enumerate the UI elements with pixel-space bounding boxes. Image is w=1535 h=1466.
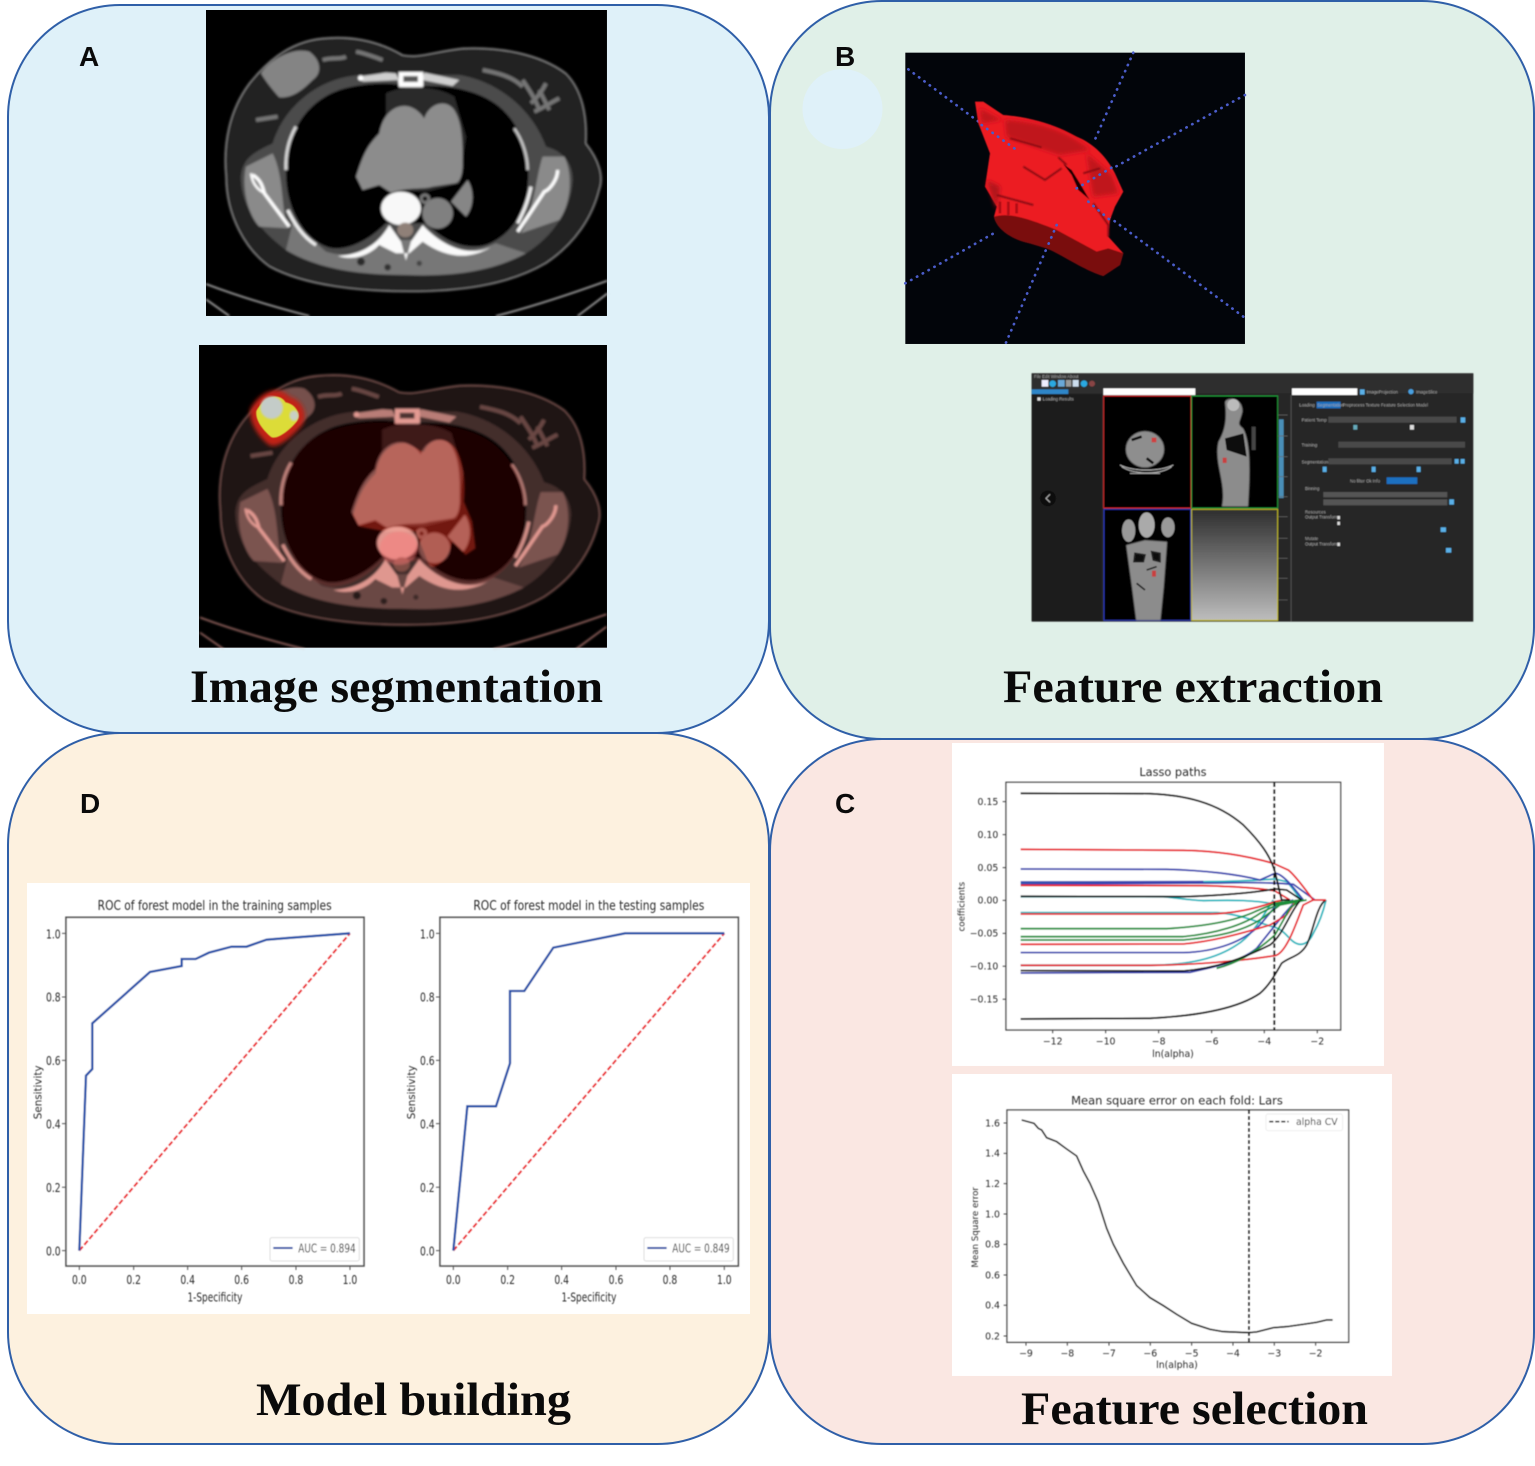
software screenshot: Segmentation	[1302, 459, 1329, 464]
label B: B	[835, 41, 855, 72]
chart: ROC testing: 0.2	[500, 1273, 515, 1287]
chart: mean square error: −9	[1019, 1348, 1033, 1359]
chart: ROC training	[32, 899, 364, 1305]
chart: Lasso paths: 0.10	[978, 830, 998, 841]
chart: Lasso paths: −0.05	[970, 929, 998, 940]
chart: Lasso paths: −0.15	[970, 995, 998, 1006]
panel: model building	[8, 733, 769, 1444]
chart: ROC testing: 0.2	[420, 1181, 435, 1195]
label A: A	[79, 41, 99, 72]
chart: ROC testing: 1.0	[420, 927, 435, 941]
chart: ROC testing: 0.8	[663, 1273, 677, 1287]
software screenshot: Loading Results	[1043, 397, 1074, 402]
software screenshot: Patient Temp	[1302, 418, 1327, 423]
chart: ROC training: 0.2	[46, 1181, 61, 1195]
chart: mean square error: 1.6	[985, 1118, 1000, 1129]
software screenshot: Output Transform	[1305, 541, 1339, 546]
panel: feature selection	[770, 739, 1534, 1444]
software screenshot	[1032, 373, 1473, 622]
software screenshot: Output Transform	[1305, 515, 1339, 520]
chart: Lasso paths	[952, 743, 1384, 1066]
chart: mean square error: 1.2	[985, 1179, 1000, 1190]
chart: Lasso paths: −0.10	[970, 962, 998, 973]
title: feature extraction: Feature extraction	[1003, 661, 1383, 713]
chart: mean square error: −2	[1309, 1348, 1323, 1359]
chart: ROC training: 1.0	[343, 1273, 357, 1287]
chart: Lasso paths: 0.15	[978, 797, 998, 808]
chart: ROC training: 0.8	[289, 1273, 303, 1287]
decorative circle	[802, 69, 882, 149]
chart: mean square error: −6	[1143, 1348, 1157, 1359]
chart: mean square error	[952, 1074, 1392, 1376]
chart: Lasso paths: −6	[1205, 1037, 1219, 1048]
panel: image segmentation	[8, 5, 769, 733]
chart: mean square error: Mean square error on each fold: Lars	[1071, 1094, 1283, 1108]
chart: mean square error: 0.2	[985, 1331, 1000, 1342]
chart: Lasso paths: ln(alpha)	[1152, 1049, 1194, 1060]
chart: ROC training: 0.0	[46, 1244, 61, 1258]
chart: ROC training: 1.0	[46, 927, 61, 941]
title: feature selection: Feature selection	[1021, 1383, 1368, 1435]
chart: mean square error: −8	[1060, 1348, 1074, 1359]
chart: Lasso paths: −4	[1257, 1037, 1271, 1048]
label D: D	[80, 788, 100, 819]
chart: ROC testing: 0.0	[446, 1273, 461, 1287]
software screenshot: Segmentation	[1317, 403, 1345, 408]
chart: ROC training: ROC of forest model in the training samples	[98, 899, 332, 914]
chart: Lasso paths: −12	[1043, 1037, 1063, 1048]
chart: ROC testing: 0.4	[554, 1273, 569, 1287]
chart: mean square error: 0.4	[985, 1301, 1000, 1312]
chart: ROC training: 1-Specificity	[187, 1291, 242, 1305]
chart: ROC training: 0.2	[126, 1273, 141, 1287]
chart: mean square error: 1.0	[985, 1209, 1000, 1220]
chart: ROC training: 0.0	[72, 1273, 87, 1287]
chart: ROC training: 0.8	[46, 991, 61, 1005]
chart: ROC testing: 0.4	[420, 1117, 435, 1131]
chart: mean square error: alpha CV	[1296, 1117, 1338, 1128]
software screenshot: Training	[1302, 443, 1318, 448]
label C: C	[835, 788, 855, 819]
chart: ROC testing: 1.0	[717, 1273, 732, 1287]
title: image segmentation: Image segmentation	[190, 661, 603, 713]
chart: mean square error: −3	[1267, 1348, 1281, 1359]
chart: Lasso paths: 0.00	[978, 896, 998, 907]
panel: feature extraction	[770, 1, 1534, 739]
software screenshot: Loading	[1299, 403, 1315, 408]
chart: ROC testing: 0.0	[420, 1244, 435, 1258]
chart: ROC training: 0.4	[180, 1273, 195, 1287]
chart: mean square error: 0.6	[985, 1270, 1000, 1281]
PET-CT scan image	[199, 345, 607, 649]
chart: Lasso paths: 0.05	[978, 863, 998, 874]
ROC charts card	[27, 883, 750, 1314]
chart: ROC testing: AUC = 0.849	[672, 1241, 730, 1255]
chart: mean square error: 0.8	[985, 1240, 1000, 1251]
CT scan image	[206, 10, 608, 316]
software screenshot: File Edit Window About	[1034, 374, 1079, 379]
chart: mean square error: 1.4	[985, 1149, 1000, 1160]
chart: Lasso paths: −2	[1310, 1037, 1324, 1048]
chart: ROC training: 0.6	[234, 1273, 249, 1287]
chart: ROC testing: 1-Specificity	[561, 1291, 616, 1305]
chart: Lasso paths: coefficients	[958, 881, 968, 931]
CT viewport: sagittal	[1192, 396, 1278, 508]
chart: ROC testing	[406, 899, 738, 1305]
software screenshot: ImageProjection	[1367, 390, 1399, 395]
chart: ROC testing: Sensitivity	[406, 1065, 418, 1119]
chart: mean square error: −5	[1185, 1348, 1199, 1359]
chart: Lasso paths: −8	[1152, 1037, 1166, 1048]
software screenshot: ImageSlice	[1416, 390, 1438, 395]
chart: mean square error: Mean Square error	[971, 1187, 981, 1268]
software screenshot: Preprocess Texture Feature Selection Model	[1343, 403, 1428, 408]
chart: mean square error: −4	[1226, 1348, 1240, 1359]
chart: ROC training: 0.6	[46, 1054, 61, 1068]
software screenshot: Binning	[1305, 486, 1320, 491]
chart: ROC training: AUC = 0.894	[298, 1241, 356, 1255]
chart: ROC training: 0.4	[46, 1117, 61, 1131]
chart: Lasso paths: −10	[1096, 1037, 1116, 1048]
chart: ROC testing: 0.6	[420, 1054, 435, 1068]
title: model building: Model building	[256, 1374, 572, 1426]
chart: Lasso paths: Lasso paths	[1139, 765, 1207, 779]
chart: ROC testing: ROC of forest model in the testing samples	[473, 899, 704, 914]
chart: ROC testing: 0.8	[420, 991, 435, 1005]
software screenshot: Resources	[1305, 509, 1326, 514]
software screenshot: No filter Ok Info	[1350, 478, 1381, 483]
CT viewport: 3D placeholder	[1192, 509, 1278, 620]
CT viewport: axial	[1104, 396, 1191, 508]
software screenshot: Mutate	[1305, 536, 1319, 541]
CT viewport: coronal	[1104, 509, 1191, 620]
chart: mean square error: −7	[1102, 1348, 1116, 1359]
chart: ROC training: Sensitivity	[32, 1065, 44, 1119]
3D tumour rendering	[905, 53, 1245, 344]
chart: mean square error: ln(alpha)	[1156, 1360, 1198, 1371]
chart: ROC testing: 0.6	[609, 1273, 623, 1287]
